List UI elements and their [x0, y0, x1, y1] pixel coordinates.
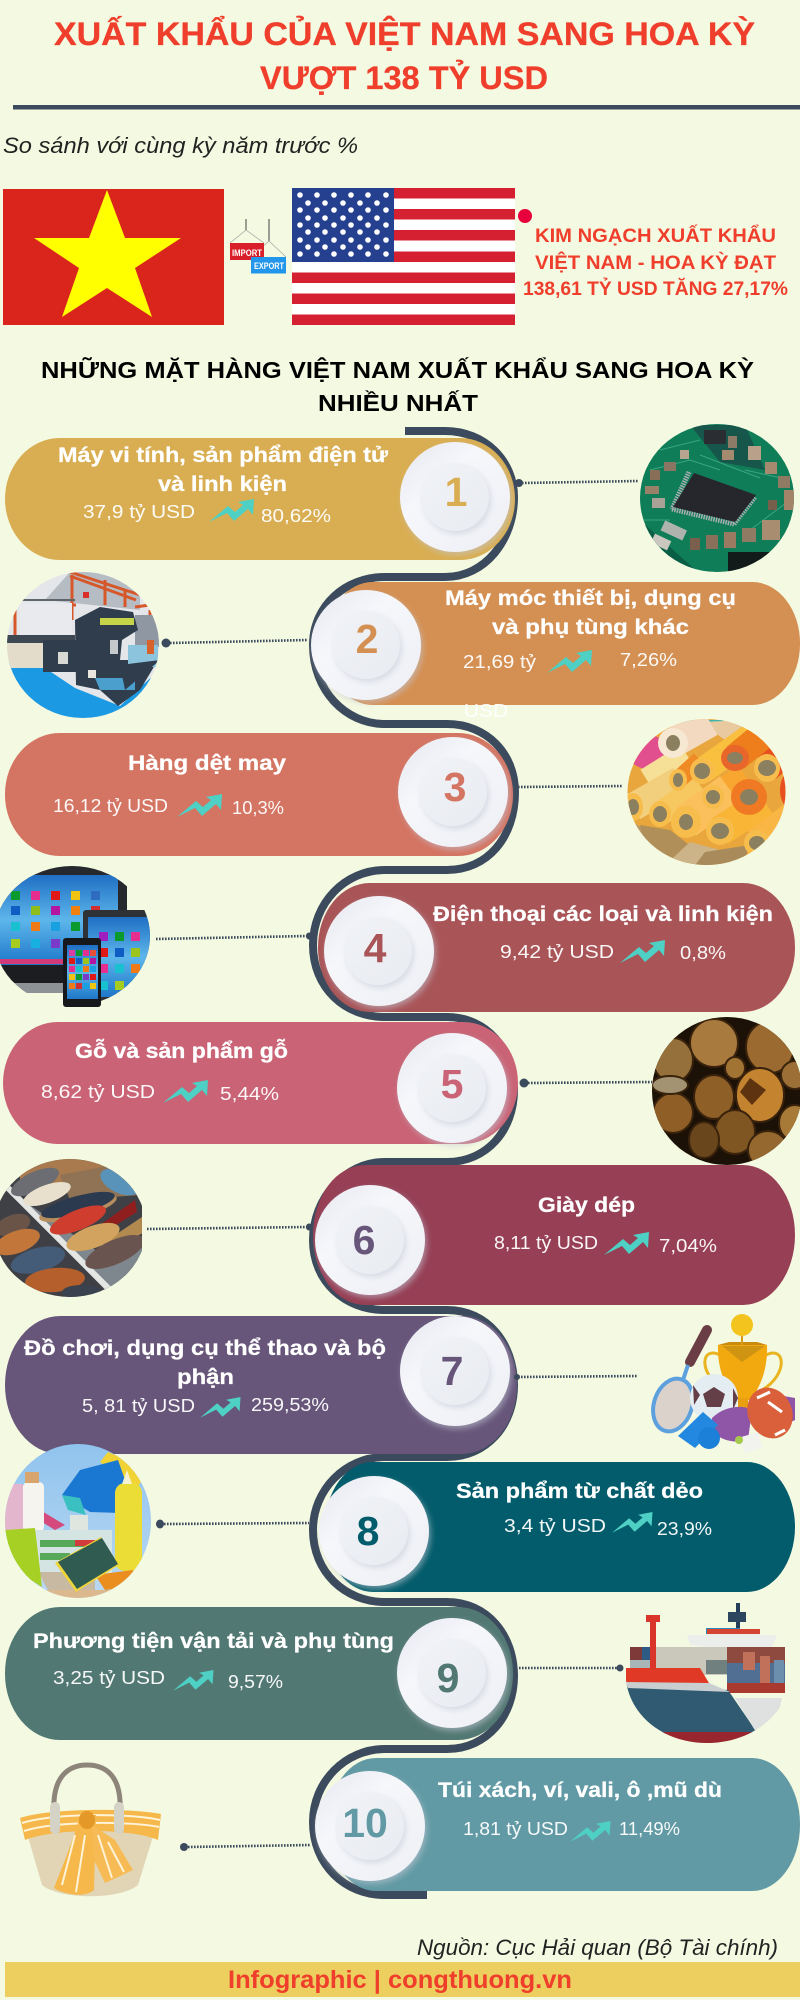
panel: row 2 machinery: 7,26%: [620, 649, 677, 670]
panel: row 5 wood: 8,62 tỷ USD: [41, 1081, 155, 1102]
photo: household plastics: [3, 1440, 153, 1605]
title: VƯỢT 138 TỶ USD: [260, 60, 548, 96]
flag: United States: [292, 188, 515, 325]
panel: row 7 toys and sports: [5, 1316, 517, 1454]
red dot: [518, 209, 532, 223]
panel: row 3 textiles: Hàng dệt may: [128, 752, 286, 775]
panel: row 8 plastics: 8: [357, 1508, 379, 1554]
connector ribbon: [313, 431, 515, 1895]
panel: row 3 textiles: 3: [444, 764, 466, 810]
panel: row 1 computers: [5, 438, 515, 560]
panel: row 1 computers: Máy vi tính, sản phẩm điện tử: [58, 444, 389, 467]
panel: row 5 wood: Gỗ và sản phẩm gỗ: [75, 1039, 288, 1063]
panel: row 3 textiles: 16,12 tỷ USD: [53, 795, 168, 816]
panel: row 9 vehicles: Phương tiện vận tải và phụ tùng: [33, 1630, 394, 1653]
photo: sports equipment: [647, 1314, 800, 1453]
panel: row 9 vehicles: 3,25 tỷ USD: [53, 1667, 165, 1688]
photo: fabric rolls: [628, 719, 786, 865]
panel: row 7 toys and sports: 5, 81 tỷ USD: [82, 1395, 195, 1416]
photo: circuit board: [638, 422, 798, 574]
panel: row 10 bags: 11,49%: [619, 1818, 680, 1839]
panel: row 1 computers: 80,62%: [261, 505, 331, 526]
photo: phones and tablets: [0, 866, 151, 1010]
photo: shoes on rack: [0, 1155, 149, 1300]
photo: handbag: [20, 1765, 161, 1896]
panel: row 10 bags: [315, 1758, 800, 1891]
panel: row 4 phones: Điện thoại các loại và linh kiện: [433, 903, 773, 926]
panel: row 10 bags: 1,81 tỷ USD: [463, 1818, 568, 1839]
flag: Vietnam: [3, 189, 224, 325]
panel: row 3 textiles: [5, 733, 513, 856]
panel: row 9 vehicles: [5, 1607, 513, 1740]
panel: row 6 footwear: Giày dép: [538, 1194, 635, 1217]
callout: export value: [523, 225, 788, 300]
panel: row 1 computers: và linh kiện: [158, 473, 287, 496]
icon: import export containers: IMPORT: [232, 248, 262, 258]
panel: row 2 machinery: USD: [464, 700, 508, 721]
panel: row 7 toys and sports: 259,53%: [251, 1394, 329, 1415]
panel: row 8 plastics: 23,9%: [657, 1518, 712, 1539]
dotted leader lines: [147, 479, 652, 1851]
callout: export value: 138,61 TỶ USD TĂNG 27,17%: [523, 278, 788, 300]
panel: row 5 wood: 5: [441, 1061, 463, 1107]
panel: row 4 phones: 9,42 tỷ USD: [500, 941, 614, 962]
panel: row 2 machinery: Máy móc thiết bị, dụng cụ: [445, 587, 736, 610]
panel: row 6 footwear: 6: [353, 1217, 375, 1263]
panel: row 5 wood: [3, 1022, 518, 1144]
title: XUẤT KHẨU CỦA VIỆT NAM SANG HOA KỲ: [54, 16, 755, 52]
panel: row 9 vehicles: 9,57%: [228, 1671, 283, 1692]
title: [54, 16, 755, 96]
panel: row 7 toys and sports: phận: [177, 1366, 234, 1389]
footer band: Infographic | congthuong.vn: [228, 1966, 572, 1994]
panel: row 4 phones: 4: [364, 925, 387, 971]
panel: row 8 plastics: 3,4 tỷ USD: [504, 1515, 606, 1536]
panel: row 2 machinery: 21,69 tỷ: [463, 651, 537, 672]
panel: row 2 machinery: và phụ tùng khác: [492, 616, 689, 639]
icon: import export containers: EXPORT: [254, 261, 284, 271]
callout: export value: KIM NGẠCH XUẤT KHẨU: [535, 225, 776, 247]
heading: top exports: [41, 356, 754, 416]
photo: stacked logs: [650, 1016, 800, 1169]
panel: row 2 machinery: [311, 582, 800, 721]
source note: Nguồn: Cục Hải quan (Bộ Tài chính): [417, 1935, 778, 1960]
panel: row 4 phones: [318, 883, 795, 1012]
photo: container ship: [626, 1603, 785, 1743]
panel: row 8 plastics: [319, 1462, 795, 1592]
panel: row 4 phones: 0,8%: [680, 942, 726, 963]
panel: row 2 machinery: 2: [356, 616, 378, 662]
heading: top exports: NHIỀU NHẤT: [318, 389, 479, 416]
panel: row 3 textiles: 10,3%: [232, 797, 284, 818]
photo: factory machinery: [7, 572, 159, 718]
heading: top exports: NHỮNG MẶT HÀNG VIỆT NAM XUẤT KHẨU SANG HOA KỲ: [41, 356, 754, 383]
callout: export value: VIỆT NAM - HOA KỲ ĐẠT: [535, 252, 776, 274]
panel: row 6 footwear: 7,04%: [659, 1235, 717, 1256]
panel: row 8 plastics: Sản phẩm từ chất dẻo: [456, 1480, 703, 1503]
panel: row 1 computers: 37,9 tỷ USD: [83, 501, 195, 522]
panel: row 10 bags: 10: [342, 1800, 388, 1846]
panel: row 6 footwear: 8,11 tỷ USD: [494, 1232, 598, 1253]
panel: row 5 wood: 5,44%: [220, 1083, 279, 1104]
panel: row 7 toys and sports: 7: [441, 1348, 463, 1394]
panel: row 10 bags: Túi xách, ví, vali, ô ,mũ dù: [438, 1779, 722, 1802]
panel: row 9 vehicles: 9: [437, 1655, 459, 1701]
panel: row 1 computers: 1: [445, 469, 467, 515]
icon: import export containers: [230, 219, 286, 274]
panel: row 7 toys and sports: Đồ chơi, dụng cụ thể thao và bộ: [24, 1337, 386, 1360]
footer band: [5, 1962, 800, 1997]
panel: row 6 footwear: [313, 1165, 795, 1305]
subtitle: So sánh với cùng kỳ năm trước %: [3, 133, 358, 158]
